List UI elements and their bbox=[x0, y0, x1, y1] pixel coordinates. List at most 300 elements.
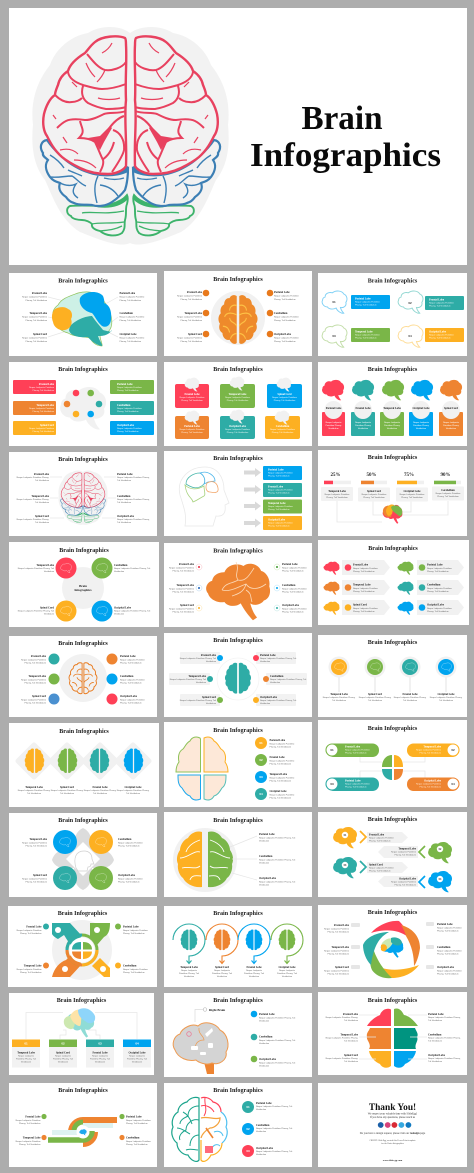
text labels: Temporal Lobe bbox=[270, 773, 288, 776]
cards row 1: Spinal Cord bbox=[278, 393, 292, 396]
text labels: Neque Ludipartis Pointilme Pharny, bbox=[84, 789, 117, 792]
box: parietal lobe: Parietal Lobe bbox=[355, 298, 371, 300]
text labels: Tuli Vestibulum bbox=[403, 699, 417, 702]
text labels: Parietal Lobe bbox=[120, 655, 136, 658]
text labels: Tuli Vestibulum bbox=[344, 1019, 358, 1022]
text labels: Vestibulum bbox=[256, 1108, 266, 1111]
boxes: Neque Ludipartis Pointilme bbox=[362, 493, 387, 496]
heading: Brain Infographics bbox=[213, 998, 263, 1004]
icon: brain with numbered dots bbox=[60, 387, 106, 430]
box: parietal lobe bbox=[351, 295, 390, 309]
text labels: Neque Ludipartis bbox=[246, 969, 262, 972]
text: cerebellum: Pharny, Tuli Vestibulum bbox=[274, 319, 296, 322]
boxes left: Spinal Cord bbox=[40, 424, 55, 427]
text labels: Neque Ludipartis Pointilme bbox=[282, 566, 308, 569]
text labels: Vestibulum bbox=[256, 1153, 266, 1156]
text: right labels: Neque Ludipartis Pointilme Pharny, bbox=[117, 476, 150, 479]
heading: Brain Infographics bbox=[58, 1088, 108, 1094]
boxes right: Parietal Lobe bbox=[117, 383, 133, 386]
text labels: Neque Ludipartis Pointilme bbox=[437, 969, 463, 972]
icon: small brain bbox=[383, 505, 402, 524]
arcs with arrows bbox=[173, 924, 303, 964]
text labels: Cerebellum bbox=[114, 564, 128, 567]
cards row 1: Pharny, Tuli Vestibulum bbox=[274, 399, 296, 402]
chart: ribbon bbox=[48, 1120, 117, 1144]
boxes: Neque Ludipartis Pointilme bbox=[268, 505, 294, 508]
cards row 2: Parietal Lobe bbox=[184, 425, 201, 428]
markers bbox=[207, 655, 269, 703]
cards row 1: Pharny, Tuli Vestibulum bbox=[181, 399, 203, 402]
text labels: Pharny, Tuli Vestibulum bbox=[437, 929, 459, 932]
box: occipital lobe: Pharny, Tuli Vestibulum bbox=[429, 337, 451, 340]
text: request: Do you have a design request, please visit our redesign page bbox=[360, 1132, 426, 1135]
text labels: Pharny, Tuli Vestibulum bbox=[437, 952, 459, 955]
circles with brains bbox=[56, 558, 112, 622]
text labels: Neque Ludipartis Pointilme Pharny, bbox=[394, 696, 427, 699]
text labels bbox=[353, 564, 453, 613]
panel: slide 27 six colour brain bbox=[318, 992, 467, 1075]
cards bbox=[169, 652, 307, 706]
cards row 1: Neque Ludipartis Pointilme bbox=[225, 396, 251, 399]
text labels: Frontal Lobe bbox=[31, 655, 47, 658]
heading: Brain Infographics bbox=[368, 726, 418, 732]
text labels: Neque Ludipartis bbox=[279, 969, 295, 972]
boxes: Occipital Lobe bbox=[268, 518, 286, 522]
callout: right brain bbox=[195, 1008, 225, 1022]
text labels: Temporal Lobe bbox=[180, 966, 199, 969]
panel: slide 1 labelled brain bbox=[9, 273, 157, 356]
text labels: Pharny, Tuli Vestibulum bbox=[369, 840, 391, 842]
text labels bbox=[17, 926, 149, 974]
icon: orange brain on circle bbox=[211, 291, 265, 345]
text labels: Tuli Vestibulum bbox=[332, 699, 346, 702]
markers: 04 bbox=[259, 792, 263, 796]
cards row 1 bbox=[175, 377, 302, 408]
panel: hero cover bbox=[9, 8, 467, 265]
text labels: Frontal Lobe bbox=[345, 746, 361, 748]
text labels: Pharny, Tuli Vestibulum bbox=[172, 590, 194, 593]
text labels: Neque Ludipartis Pointilme Pharny, bbox=[430, 696, 463, 699]
markers: 03 bbox=[246, 1149, 250, 1153]
columns: Neque Ludipartis bbox=[92, 1055, 108, 1058]
columns: Neque Ludipartis bbox=[129, 1055, 145, 1058]
text: left labels: Neque Ludipartis Pointilme Pharny, bbox=[17, 476, 50, 479]
bubble 01 bbox=[322, 291, 347, 313]
boxes: Pharny, Tuli Vestibulum bbox=[363, 496, 385, 499]
box: temporal lobe: Pharny, Tuli Vestibulum bbox=[355, 337, 377, 340]
heading: Brain Infographics bbox=[250, 100, 441, 174]
text labels: Vestibulum bbox=[44, 570, 54, 573]
text labels: Neque Ludipartis Pointilme Pharny, bbox=[18, 789, 51, 792]
heading: Brain Infographics bbox=[58, 641, 108, 647]
text: temporal lobe: Pharny, Tuli Vestibulum bbox=[180, 319, 202, 322]
panel: slide 24 pinwheel bbox=[318, 905, 467, 987]
text labels: Occipital Lobe bbox=[428, 1054, 446, 1057]
text labels: Frontal Lobe bbox=[402, 693, 418, 696]
text labels: Neque Ludipartis Pointilme Pharny, Tuli bbox=[170, 678, 207, 681]
heading: Brain Infographics bbox=[58, 911, 108, 917]
text: left labels: Neque Ludipartis Pointilme Pharny, bbox=[17, 518, 50, 521]
text: frontal lobe: Frontal Lobe bbox=[187, 291, 203, 294]
boxes: Occipital Lobe bbox=[404, 490, 421, 493]
text labels: Neque Ludipartis Pointilme Pharny, Tuli bbox=[260, 699, 297, 702]
text labels: Parietal Lobe bbox=[428, 1013, 444, 1016]
cards: Neque Ludipartis bbox=[384, 421, 400, 424]
text: spinal cord: Pharny, Tuli Vestibulum bbox=[180, 340, 202, 343]
boxes: Pharny, Tuli Vestibulum bbox=[326, 496, 348, 499]
text: left labels: Neque Ludipartis Pointilme Pharny, bbox=[17, 498, 50, 501]
text labels: Neque Ludipartis Pointilme bbox=[282, 607, 308, 610]
text labels: Neque Ludipartis Pointilme Pharny, bbox=[326, 1037, 359, 1040]
text labels: Vestibulum bbox=[44, 613, 54, 616]
boxes right: Pharny, Tuli Vestibulum bbox=[117, 430, 139, 433]
text: frontal lobe: Neque Ludipartis Pointilme bbox=[177, 295, 203, 298]
text labels: Neque Ludipartis Pointilme bbox=[118, 841, 144, 844]
cards: Neque Ludipartis bbox=[326, 421, 341, 424]
cards row 1: Neque Ludipartis Pointilme bbox=[180, 396, 205, 399]
text labels: Pharny, Tuli Vestibulum bbox=[427, 610, 449, 613]
icons: speech brains: 04 bbox=[439, 878, 442, 881]
text labels: Neque Ludipartis Pointilme Pharny, bbox=[359, 696, 392, 699]
boxes bbox=[321, 486, 464, 502]
boxes: Frontal Lobe bbox=[268, 486, 284, 488]
pins bbox=[328, 656, 456, 692]
text labels: Spinal Cord bbox=[33, 874, 48, 877]
panel: slide 29 doodle brain bbox=[164, 1083, 312, 1167]
text labels: Pharny, Tuli Vestibulum bbox=[282, 569, 304, 572]
panel: slide 20 yellow green brain bbox=[164, 812, 312, 897]
text: cerebellum: Pharny, Tuli Vestibulum bbox=[120, 319, 141, 322]
text labels: Tuli Vestibulum bbox=[428, 1040, 442, 1043]
diamonds with brains bbox=[18, 745, 149, 777]
boxes: Pharny, Tuli Vestibulum bbox=[268, 492, 290, 495]
text: right labels: Cerebellum bbox=[117, 495, 131, 498]
text: cerebellum: Neque Ludipartis Pointilme bbox=[274, 316, 300, 319]
text labels: Pharny, Tuli Vestibulum bbox=[327, 930, 349, 933]
box: temporal lobe: Temporal Lobe bbox=[355, 330, 373, 334]
columns: Pointilme Pharny, Tuli bbox=[16, 1058, 37, 1061]
text labels: Neque Ludipartis Pointilme bbox=[270, 743, 295, 746]
text labels: Neque Ludipartis Pointilme Pharny, bbox=[326, 1057, 359, 1060]
boxes: Cerebellum bbox=[441, 489, 455, 492]
text labels: Neque Ludipartis Pointilme bbox=[16, 1119, 41, 1122]
text: left labels bbox=[17, 473, 50, 524]
text labels: Occipital Lobe bbox=[437, 966, 455, 969]
columns: 01 bbox=[24, 1042, 28, 1046]
text labels: Neque Ludipartis Pointilme bbox=[169, 566, 195, 569]
text: temporal lobe: Temporal Lobe bbox=[29, 312, 48, 315]
cards row 2: Neque Ludipartis Pointilme bbox=[270, 428, 296, 431]
centre circle: Brain bbox=[79, 584, 87, 588]
columns: Neque Ludipartis bbox=[55, 1055, 71, 1058]
panel: slide 4 cards around brain bbox=[9, 362, 157, 446]
text labels: Frontal Lobe bbox=[201, 654, 217, 657]
columns: Vestibulum bbox=[95, 1061, 105, 1064]
text labels: Frontal Lobe bbox=[26, 926, 42, 928]
heading: Brain Infographics bbox=[213, 456, 263, 462]
icon: teal brain bbox=[217, 658, 259, 700]
text labels: Spinal Cord bbox=[40, 606, 55, 610]
text: right labels: Neque Ludipartis Pointilme Pharny, bbox=[117, 498, 150, 501]
text labels: Neque Ludipartis bbox=[181, 969, 197, 972]
text labels: Occipital Lobe bbox=[279, 966, 296, 969]
cards row 2: Neque Ludipartis Pointilme bbox=[225, 428, 251, 431]
boxes right: Pharny, Tuli Vestibulum bbox=[117, 410, 139, 413]
text labels: Pharny, Tuli Vestibulum bbox=[394, 854, 416, 856]
text labels: Neque Ludipartis Pointilme Pharny, Tuli bbox=[259, 858, 296, 861]
text labels: Neque Ludipartis Pointilme Pharny, Tuli bbox=[270, 678, 307, 681]
text labels: Pharny, Tuli Vestibulum bbox=[394, 884, 416, 886]
text labels: Temporal Lobe bbox=[23, 1136, 41, 1140]
text labels: Temporal Lobe bbox=[423, 746, 442, 748]
text: right labels: Tuli Vestibulum bbox=[117, 479, 131, 482]
text labels: Pharny, Tuli Vestibulum bbox=[123, 971, 145, 974]
columns: Pointilme Pharny, Tuli bbox=[127, 1058, 148, 1061]
icons: brains bbox=[181, 929, 295, 950]
heading: Brain Infographics bbox=[213, 911, 263, 917]
text labels bbox=[21, 655, 146, 704]
text labels: Temporal Lobe bbox=[36, 564, 55, 567]
columns: Vestibulum bbox=[58, 1061, 68, 1064]
cards: Neque Ludipartis bbox=[413, 421, 429, 424]
text labels: Parietal Lobe bbox=[259, 833, 275, 836]
text labels bbox=[369, 834, 417, 886]
text: frontal lobe: Pharny, Tuli Vestibulum bbox=[25, 299, 47, 302]
text labels: Cerebellum bbox=[259, 1036, 273, 1038]
boxes: Parietal Lobe bbox=[268, 468, 284, 472]
text labels bbox=[324, 923, 463, 975]
text labels: Neque Ludipartis Pointilme bbox=[427, 587, 453, 590]
text labels: Frontal Lobe bbox=[270, 756, 285, 759]
text labels: Spinal Cord bbox=[202, 696, 217, 699]
boxes bbox=[263, 466, 302, 530]
text labels: Cerebellum bbox=[270, 675, 284, 678]
pills bbox=[326, 744, 459, 791]
icons: coloured brains bbox=[322, 380, 462, 400]
text labels: Parietal Lobe bbox=[427, 564, 443, 566]
panel: slide 12 brains with tags bbox=[318, 540, 469, 625]
text labels bbox=[345, 746, 442, 789]
text labels: Spinal Cord bbox=[344, 1054, 359, 1057]
panel: slide 22 arms around ring bbox=[8, 906, 157, 987]
text labels: Neque Ludipartis Pointilme bbox=[353, 607, 379, 610]
text labels: Pharny, Tuli Vestibulum bbox=[345, 752, 367, 755]
text labels: Vestibulum bbox=[114, 570, 124, 573]
text: parietal lobe: Neque Ludipartis Pointilme bbox=[274, 295, 300, 298]
panel: slide 23 arc arrows bbox=[164, 906, 312, 987]
columns: Vestibulum bbox=[132, 1061, 142, 1064]
pills: 01 bbox=[330, 748, 334, 752]
text labels: Neque Ludipartis Pointilme bbox=[21, 678, 47, 681]
cards row 1: Neque Ludipartis Pointilme bbox=[272, 396, 298, 399]
icon: doodle brain bbox=[172, 1097, 227, 1161]
icon: peach quadrant brain bbox=[176, 737, 228, 800]
cards: Pointilme Pharny bbox=[355, 424, 372, 427]
chevrons bbox=[360, 831, 425, 888]
panel: slide 11 orange side brain bbox=[164, 543, 312, 627]
text: spinal cord: Neque Ludipartis Pointilme bbox=[22, 337, 48, 340]
cards: Neque Ludipartis bbox=[443, 421, 459, 424]
text: parietal lobe: Neque Ludipartis Pointilme bbox=[120, 296, 145, 299]
text labels: Temporal Lobe bbox=[28, 675, 47, 678]
text labels: Pharny, Tuli Vestibulum bbox=[19, 1143, 41, 1146]
panel: slide 10 four circles bbox=[9, 542, 159, 627]
text labels: Neque Ludipartis Pointilme Pharny, Tuli bbox=[259, 880, 296, 883]
boxes: Neque Ludipartis Pointilme bbox=[268, 472, 294, 475]
boxes right: Neque Ludipartis Pointilme bbox=[117, 427, 143, 430]
icon: six colour brain bbox=[367, 1008, 418, 1068]
text labels: Neque Ludipartis Pointilme Pharny, bbox=[323, 696, 356, 699]
text labels: Vestibulum bbox=[114, 613, 124, 616]
panel: slide 2 orange brain bbox=[164, 271, 312, 356]
heading: Brain Infographics bbox=[213, 818, 263, 824]
text: parietal lobe: Parietal Lobe bbox=[120, 292, 136, 295]
text labels: Spinal Cord bbox=[60, 786, 74, 789]
text labels: Neque Ludipartis Pointilme bbox=[427, 607, 453, 610]
cards: Vestibulum bbox=[416, 427, 426, 430]
text: left labels: Tuli Vestibulum bbox=[35, 521, 49, 524]
text labels: Neque Ludipartis Pointilme bbox=[369, 866, 395, 870]
cards: Vestibulum bbox=[358, 427, 368, 430]
markers bbox=[345, 564, 425, 611]
text labels: Occipital Lobe bbox=[120, 695, 138, 698]
panel: slide 8 head profile bbox=[164, 451, 312, 536]
icons: small brains bbox=[324, 562, 414, 615]
text: left labels: Tuli Vestibulum bbox=[35, 501, 49, 504]
text: temporal lobe: Temporal Lobe bbox=[184, 312, 203, 315]
text labels: Pharny, Tuli Vestibulum bbox=[282, 610, 304, 613]
heading: Brain Infographics bbox=[368, 455, 418, 461]
text labels: Frontal Lobe bbox=[179, 563, 195, 566]
text labels: Occipital Lobe bbox=[427, 604, 445, 606]
boxes: Neque Ludipartis Pointilme bbox=[268, 489, 294, 492]
centre circle: Infographics bbox=[74, 588, 92, 592]
text labels: Neque Ludipartis Pointilme bbox=[123, 929, 149, 932]
text labels: Cerebellum bbox=[437, 946, 451, 949]
text labels bbox=[22, 838, 144, 883]
text labels: Pharny, Tuli Vestibulum bbox=[270, 780, 291, 783]
chart: pinwheel bbox=[363, 921, 420, 978]
text labels bbox=[169, 563, 308, 613]
box: temporal lobe bbox=[351, 328, 390, 342]
text: temporal lobe: Neque Ludipartis Pointilme bbox=[177, 316, 203, 319]
text labels: Neque Ludipartis Pointilme Pharny, Tuli bbox=[114, 567, 151, 570]
text: frontal lobe: Neque Ludipartis Pointilme bbox=[22, 296, 48, 299]
heading: Brain Infographics bbox=[213, 728, 263, 734]
panel: slide 7 line brain bbox=[9, 452, 157, 536]
boxes left: Pharny, Tuli Vestibulum bbox=[32, 410, 54, 413]
text labels: Vestibulum bbox=[259, 1042, 269, 1045]
text labels: Neque Ludipartis Pointilme bbox=[324, 969, 350, 972]
icon: orange outline brain bbox=[59, 654, 107, 702]
text: occipital lobe: Pharny, Tuli Vestibulum bbox=[274, 340, 296, 343]
text labels: Pharny, Tuli Vestibulum bbox=[25, 844, 47, 847]
text labels: Occipital Lobe bbox=[125, 786, 142, 789]
text labels: Neque Ludipartis Pointilme bbox=[416, 783, 442, 786]
centre circle bbox=[62, 567, 104, 609]
cards: Neque Ludipartis bbox=[355, 421, 371, 424]
text labels: Neque Ludipartis Pointilme bbox=[391, 850, 417, 854]
cards row 1: Temporal Lobe bbox=[229, 393, 247, 396]
panel: slide 19 four circles cross bbox=[9, 813, 157, 897]
text labels: Pharny, Tuli Vestibulum bbox=[327, 972, 349, 975]
text labels: Neque Ludipartis Pointilme bbox=[270, 777, 295, 780]
text labels: Pharny, Tuli Vestibulum bbox=[123, 932, 145, 935]
cards bbox=[322, 401, 463, 436]
text labels: Neque Ludipartis Pointilme Pharny, Tuli bbox=[180, 699, 217, 702]
leader lines bbox=[230, 836, 257, 880]
panel: slide 9 percentage bars bbox=[318, 450, 467, 536]
callout: right brain: Right Brain bbox=[209, 1008, 225, 1012]
box: temporal lobe: Neque Ludipartis Pointilme bbox=[355, 334, 381, 337]
panel: slide 28 ribbon bbox=[9, 1083, 157, 1167]
text labels: Pharny, Tuli Vestibulum bbox=[118, 844, 140, 847]
text labels: Neque Ludipartis Pointilme bbox=[391, 880, 417, 884]
heading: Brain Infographics bbox=[57, 998, 107, 1004]
panel: slide 25 pastel brain columns bbox=[9, 993, 154, 1075]
cards: Frontal Lobe bbox=[355, 407, 371, 410]
text labels: Parietal Lobe bbox=[123, 926, 139, 928]
text labels: Occipital Lobe bbox=[114, 606, 132, 610]
markers bbox=[203, 290, 273, 337]
text labels: Vestibulum bbox=[282, 975, 292, 978]
cards row 2 bbox=[175, 410, 300, 439]
text: parietal lobe: Pharny, Tuli Vestibulum bbox=[274, 298, 296, 301]
text labels: Cerebellum bbox=[259, 855, 273, 858]
text labels bbox=[256, 1102, 293, 1156]
text labels: Neque Ludipartis Pointilme Pharny, bbox=[428, 1057, 461, 1060]
icon: two colour brain bbox=[173, 828, 237, 892]
bubble 01: 01 bbox=[332, 300, 336, 304]
columns: Spinal Cord bbox=[56, 1052, 70, 1054]
text: spinal cord: Pharny, Tuli Vestibulum bbox=[25, 340, 47, 343]
box: frontal lobe bbox=[425, 296, 464, 310]
box: frontal lobe: Pharny, Tuli Vestibulum bbox=[429, 305, 451, 308]
columns: Neque Ludipartis bbox=[18, 1055, 34, 1058]
cards: Vestibulum bbox=[446, 427, 456, 430]
box: parietal lobe: Neque Ludipartis Pointilme bbox=[355, 301, 381, 304]
text: parietal lobe: Parietal Lobe bbox=[274, 291, 290, 294]
text labels: Neque Ludipartis Pointilme Pharny, Tuli bbox=[18, 567, 55, 570]
text: occipital lobe: Neque Ludipartis Pointilme bbox=[120, 337, 145, 340]
icon: layered brain bbox=[58, 470, 108, 525]
icon: pastel brain bbox=[64, 1008, 95, 1038]
heading: Brain Infographics bbox=[59, 729, 109, 735]
bubble 04: 04 bbox=[408, 334, 412, 338]
text labels: Neque Ludipartis Pointilme bbox=[416, 749, 442, 752]
cards row 2: Occipital Lobe bbox=[229, 425, 247, 428]
leader lines bbox=[50, 477, 116, 518]
text labels: Pharny, Tuli Vestibulum bbox=[20, 932, 42, 935]
text: occipital lobe: Pharny, Tuli Vestibulum bbox=[120, 340, 141, 343]
text: credit: for the Brain Infographics bbox=[381, 1142, 404, 1145]
markers bbox=[43, 924, 121, 968]
chart: progress bars: 75% bbox=[404, 473, 414, 478]
text labels bbox=[18, 786, 150, 795]
text labels: Parietal Lobe bbox=[437, 923, 453, 926]
text labels: Occipital Lobe bbox=[260, 696, 278, 699]
text: occipital lobe: Occipital Lobe bbox=[120, 333, 137, 336]
text labels: Temporal Lobe bbox=[29, 838, 48, 841]
connectors bbox=[26, 1012, 137, 1039]
text labels: Pharny, Tuli Vestibulum bbox=[118, 880, 140, 883]
text labels bbox=[16, 1116, 152, 1146]
text labels: Neque Ludipartis Pointilme bbox=[120, 678, 146, 681]
text labels: Neque Ludipartis Pointilme bbox=[353, 587, 379, 590]
cross shape bbox=[52, 828, 114, 890]
bubble 03: 03 bbox=[332, 334, 336, 338]
text labels: Temporal Lobe bbox=[398, 848, 417, 850]
